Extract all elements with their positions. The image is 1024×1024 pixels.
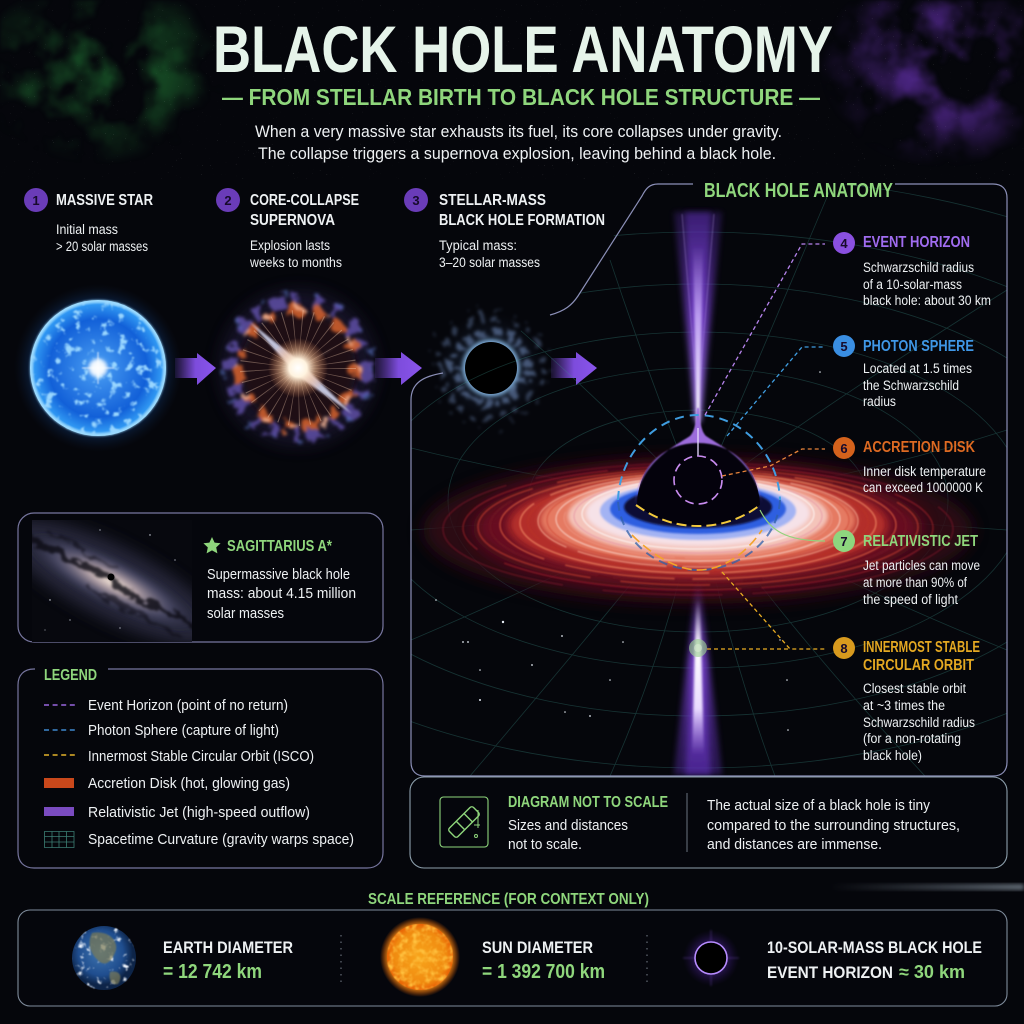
ISCO marker (689, 639, 707, 657)
panel heading: BLACK HOLE ANATOMY (704, 180, 894, 202)
step 3: black hole formation label: Typical mass: (439, 238, 517, 253)
arrow: black hole to anatomy diagram (551, 352, 597, 385)
icon: massive blue star (14, 284, 182, 452)
Sagittarius text: solar masses (207, 606, 284, 622)
legend: event horizon: Event Horizon (point of no return) (88, 698, 288, 714)
callout 6: accretion disk: 6 (840, 441, 848, 456)
callout 8: innermost stable circular orbit: INNERMOST STABLE (863, 639, 980, 656)
black hole label: 10-SOLAR-MASS BLACK HOLE (767, 938, 982, 957)
step 2: supernova label: 2 (224, 193, 232, 208)
ISCO rings (632, 505, 762, 570)
callout 4: event horizon: 4 (840, 236, 848, 251)
legend: accretion disk: Accretion Disk (hot, glowing gas) (88, 776, 290, 792)
callout 5: photon sphere: 5 (840, 339, 848, 354)
step 1: massive star label: 1 (32, 193, 40, 208)
earth label: EARTH DIAMETER (163, 938, 293, 957)
step 3: black hole formation label: BLACK HOLE FORMATION (439, 212, 605, 229)
accretion disk (423, 456, 973, 604)
black hole label: EVENT HORIZON (767, 963, 893, 982)
legend heading: LEGEND (44, 667, 97, 684)
callout 8: innermost stable circular orbit: Schwarzschild radius (863, 715, 975, 730)
image: milky way (32, 520, 192, 642)
purple nebula (825, 0, 1024, 157)
leader: ISCO (707, 572, 825, 649)
callout 8: innermost stable circular orbit: black hole) (863, 748, 922, 763)
callout 4: event horizon: of a 10-solar-mass (863, 277, 962, 292)
callout 8: innermost stable circular orbit: at ~3 times the (863, 698, 945, 713)
photon sphere ring (618, 415, 780, 570)
step 1: massive star label: Initial mass (56, 222, 118, 237)
Sagittarius text: mass: about 4.15 million (207, 586, 356, 602)
title: BLACK HOLE ANATOMY (213, 12, 833, 86)
arrow: star to supernova (175, 353, 216, 385)
Sagittarius text: Supermassive black hole (207, 567, 350, 583)
step 2: supernova label: Explosion lasts (250, 238, 330, 253)
callout 5: photon sphere: Located at 1.5 times (863, 361, 972, 376)
black hole label (767, 938, 982, 982)
callout 7: relativistic jet: RELATIVISTIC JET (863, 533, 978, 550)
callout 4: event horizon: EVENT HORIZON (863, 234, 970, 251)
legend: spacetime curvature: Spacetime Curvature (gravity warps space) (88, 832, 354, 848)
earth label: = 12 742 km (163, 961, 262, 983)
explanatory text: and distances are immense. (707, 837, 882, 853)
callout 7: relativistic jet: Jet particles can move (863, 558, 980, 573)
callout 8: innermost stable circular orbit: Closest stable orbit (863, 681, 966, 696)
callout 5: photon sphere (833, 335, 974, 409)
event horizon ring (674, 456, 722, 504)
icon: supernova explosion (220, 290, 376, 446)
callout 8: innermost stable circular orbit: (for a non-rotating (863, 731, 961, 746)
callout 5: photon sphere: radius (863, 394, 896, 409)
callout 8: innermost stable circular orbit: 8 (840, 641, 848, 656)
callout 7: relativistic jet (833, 530, 980, 607)
not-to-scale heading: DIAGRAM NOT TO SCALE (508, 794, 668, 811)
intro text: When a very massive star exhausts its fuel, its core collapses under gravity. (255, 122, 782, 141)
callout 7: relativistic jet: at more than 90% of (863, 575, 967, 590)
step 3: black hole formation label (404, 188, 605, 270)
leader: accretion disk (722, 449, 825, 476)
scale reference heading: SCALE REFERENCE (FOR CONTEXT ONLY) (368, 891, 649, 908)
step 1: massive star label: MASSIVE STAR (56, 192, 153, 209)
panel: black hole anatomy diagram (410, 183, 1008, 776)
step 2: supernova label: CORE-COLLAPSE (250, 192, 359, 209)
intro text: The collapse triggers a supernova explosion, leaving behind a black hole. (258, 144, 776, 163)
callout 4: event horizon: Schwarzschild radius (863, 260, 974, 275)
not-to-scale note: not to scale. (508, 837, 582, 853)
black hole label: ≈ 30 km (899, 962, 965, 982)
callout 7: relativistic jet: the speed of light (863, 592, 958, 607)
explanatory text: compared to the surrounding structures, (707, 818, 960, 834)
legend: photon sphere: Photon Sphere (capture of light) (88, 723, 279, 739)
callout 6: accretion disk: Inner disk temperature (863, 464, 986, 479)
not-to-scale note (508, 818, 628, 853)
step 1: massive star label (24, 188, 153, 254)
spacetime grid (412, 184, 1006, 776)
arrow: supernova to black hole (375, 352, 422, 385)
lower relativistic jet (674, 585, 722, 775)
earth label (163, 938, 293, 983)
step 2: supernova label (216, 188, 359, 270)
step 3: black hole formation label: STELLAR-MASS (439, 192, 546, 209)
icon: star (203, 537, 221, 553)
legend: ISCO: Innermost Stable Circular Orbit (ISCO) (88, 749, 314, 765)
upper relativistic jet (674, 212, 722, 424)
legend: relativistic jet: Relativistic Jet (high-speed outflow) (88, 805, 310, 821)
callout 8: innermost stable circular orbit (833, 637, 980, 763)
leader: event horizon (705, 244, 825, 415)
callout 7: relativistic jet: 7 (840, 534, 848, 549)
callout 5: photon sphere: the Schwarzschild (863, 378, 959, 393)
callout 6: accretion disk: can exceed 1000000 K (863, 480, 983, 495)
sun label: SUN DIAMETER (482, 938, 593, 957)
sun label: = 1 392 700 km (482, 961, 605, 983)
panel: diagram not to scale (410, 777, 1007, 868)
not-to-scale note: Sizes and distances (508, 818, 628, 834)
step 1: massive star label: > 20 solar masses (56, 239, 148, 254)
explanatory text (707, 798, 960, 853)
icon: earth (72, 926, 136, 990)
icon: newly formed black hole (431, 308, 551, 428)
callout 8: innermost stable circular orbit: CIRCULAR ORBIT (863, 657, 974, 674)
explanatory text: The actual size of a black hole is tiny (707, 798, 931, 814)
star field (0, 0, 1024, 180)
panel: Sagittarius A* (17, 512, 384, 643)
icon: ruler (440, 797, 488, 847)
panel: legend (18, 667, 383, 868)
callout 4: event horizon (833, 232, 991, 308)
Sagittarius text (207, 567, 356, 622)
callout 6: accretion disk (833, 437, 986, 495)
icon: black hole (683, 930, 739, 986)
Sagittarius heading: SAGITTARIUS A* (227, 538, 333, 555)
disk streaks (443, 463, 953, 595)
step 2: supernova label: weeks to months (249, 255, 342, 270)
step 2: supernova label: SUPERNOVA (250, 212, 335, 229)
callout 6: accretion disk: ACCRETION DISK (863, 439, 975, 456)
intro text (255, 122, 782, 163)
black hole shadow dome (635, 408, 762, 526)
green nebula (1, 0, 203, 156)
step 3: black hole formation label: 3 (412, 193, 420, 208)
subtitle: — FROM STELLAR BIRTH TO BLACK HOLE STRUCTURE — (222, 84, 820, 110)
icon: sun (380, 917, 460, 997)
step 3: black hole formation label: 3–20 solar masses (439, 255, 540, 270)
sun label (482, 938, 605, 983)
panel outline (411, 184, 1007, 776)
diagram stars (435, 371, 821, 731)
leader: photon sphere (727, 347, 825, 436)
panel: scale reference (18, 910, 1007, 1006)
callout 4: event horizon: black hole: about 30 km (863, 293, 991, 308)
callout 5: photon sphere: PHOTON SPHERE (863, 338, 974, 355)
leader: relativistic jet (760, 510, 825, 541)
